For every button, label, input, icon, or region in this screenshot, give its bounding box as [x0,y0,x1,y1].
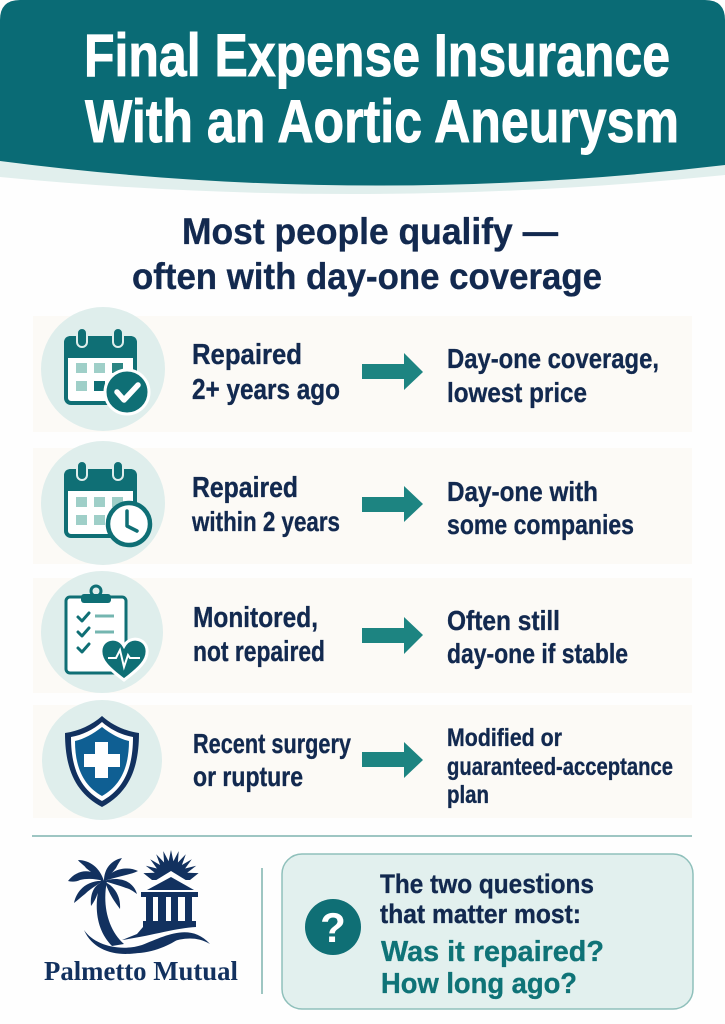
outcome text [447,724,673,809]
outcome text: day-one if stable [447,638,628,669]
callout: the two questions [282,854,693,1009]
arrow [362,486,423,522]
condition text: Monitored, [193,602,318,634]
callout questions [381,936,604,1000]
condition text: 2+ years ago [192,374,340,406]
condition text [192,339,340,406]
condition text: Repaired [192,339,302,371]
icon: medical shield [65,716,139,807]
icon: calendar with check [64,328,149,414]
icon: question mark: ? [320,904,346,951]
outcome text: Modified or [447,724,562,752]
condition text [193,602,325,668]
outcome text [447,476,634,540]
logo: Palmetto Mutual [44,850,238,986]
condition text: Recent surgery [193,728,351,759]
callout intro text: that matter most: [380,899,581,929]
title [84,22,679,155]
icon: question mark [305,899,361,955]
outcome text: some companies [447,509,634,540]
condition text: Repaired [192,472,298,504]
icon: calendar with clock [64,461,150,545]
outcome text: plan [447,781,489,809]
outcome text: Day-one with [447,476,598,507]
icon: palm tree, temple, sun and waves [68,850,210,954]
callout intro text: The two questions [380,869,594,899]
condition text [193,728,351,792]
icon: clipboard with heart [66,586,147,680]
callout questions: Was it repaired? [381,936,604,968]
subheading [132,211,602,297]
outcome text: lowest price [447,377,587,408]
row: repaired 2+ years ago [33,307,692,432]
condition text [191,472,340,537]
subheading: often with day-one coverage [132,256,602,297]
row: recent surgery or rupture [33,700,692,820]
callout intro text [380,869,594,929]
logo: Palmetto Mutual: Palmetto Mutual [44,956,238,986]
condition text: not repaired [193,636,325,668]
outcome text: Often still [447,605,560,636]
arrow [362,617,423,654]
callout questions: How long ago? [381,968,577,1000]
arrow [362,353,423,390]
row: repaired within 2 years [33,441,692,565]
outcome text: Day-one coverage, [447,343,659,374]
outcome text: guaranteed-acceptance [447,753,673,781]
arrow [362,742,423,778]
condition text: or rupture [193,761,303,792]
outcome text [447,605,628,669]
header banner [0,0,725,194]
subheading: Most people qualify — [182,211,558,252]
condition text: within 2 years [191,506,340,537]
outcome text [447,343,659,408]
row: monitored, not repaired [33,571,692,693]
